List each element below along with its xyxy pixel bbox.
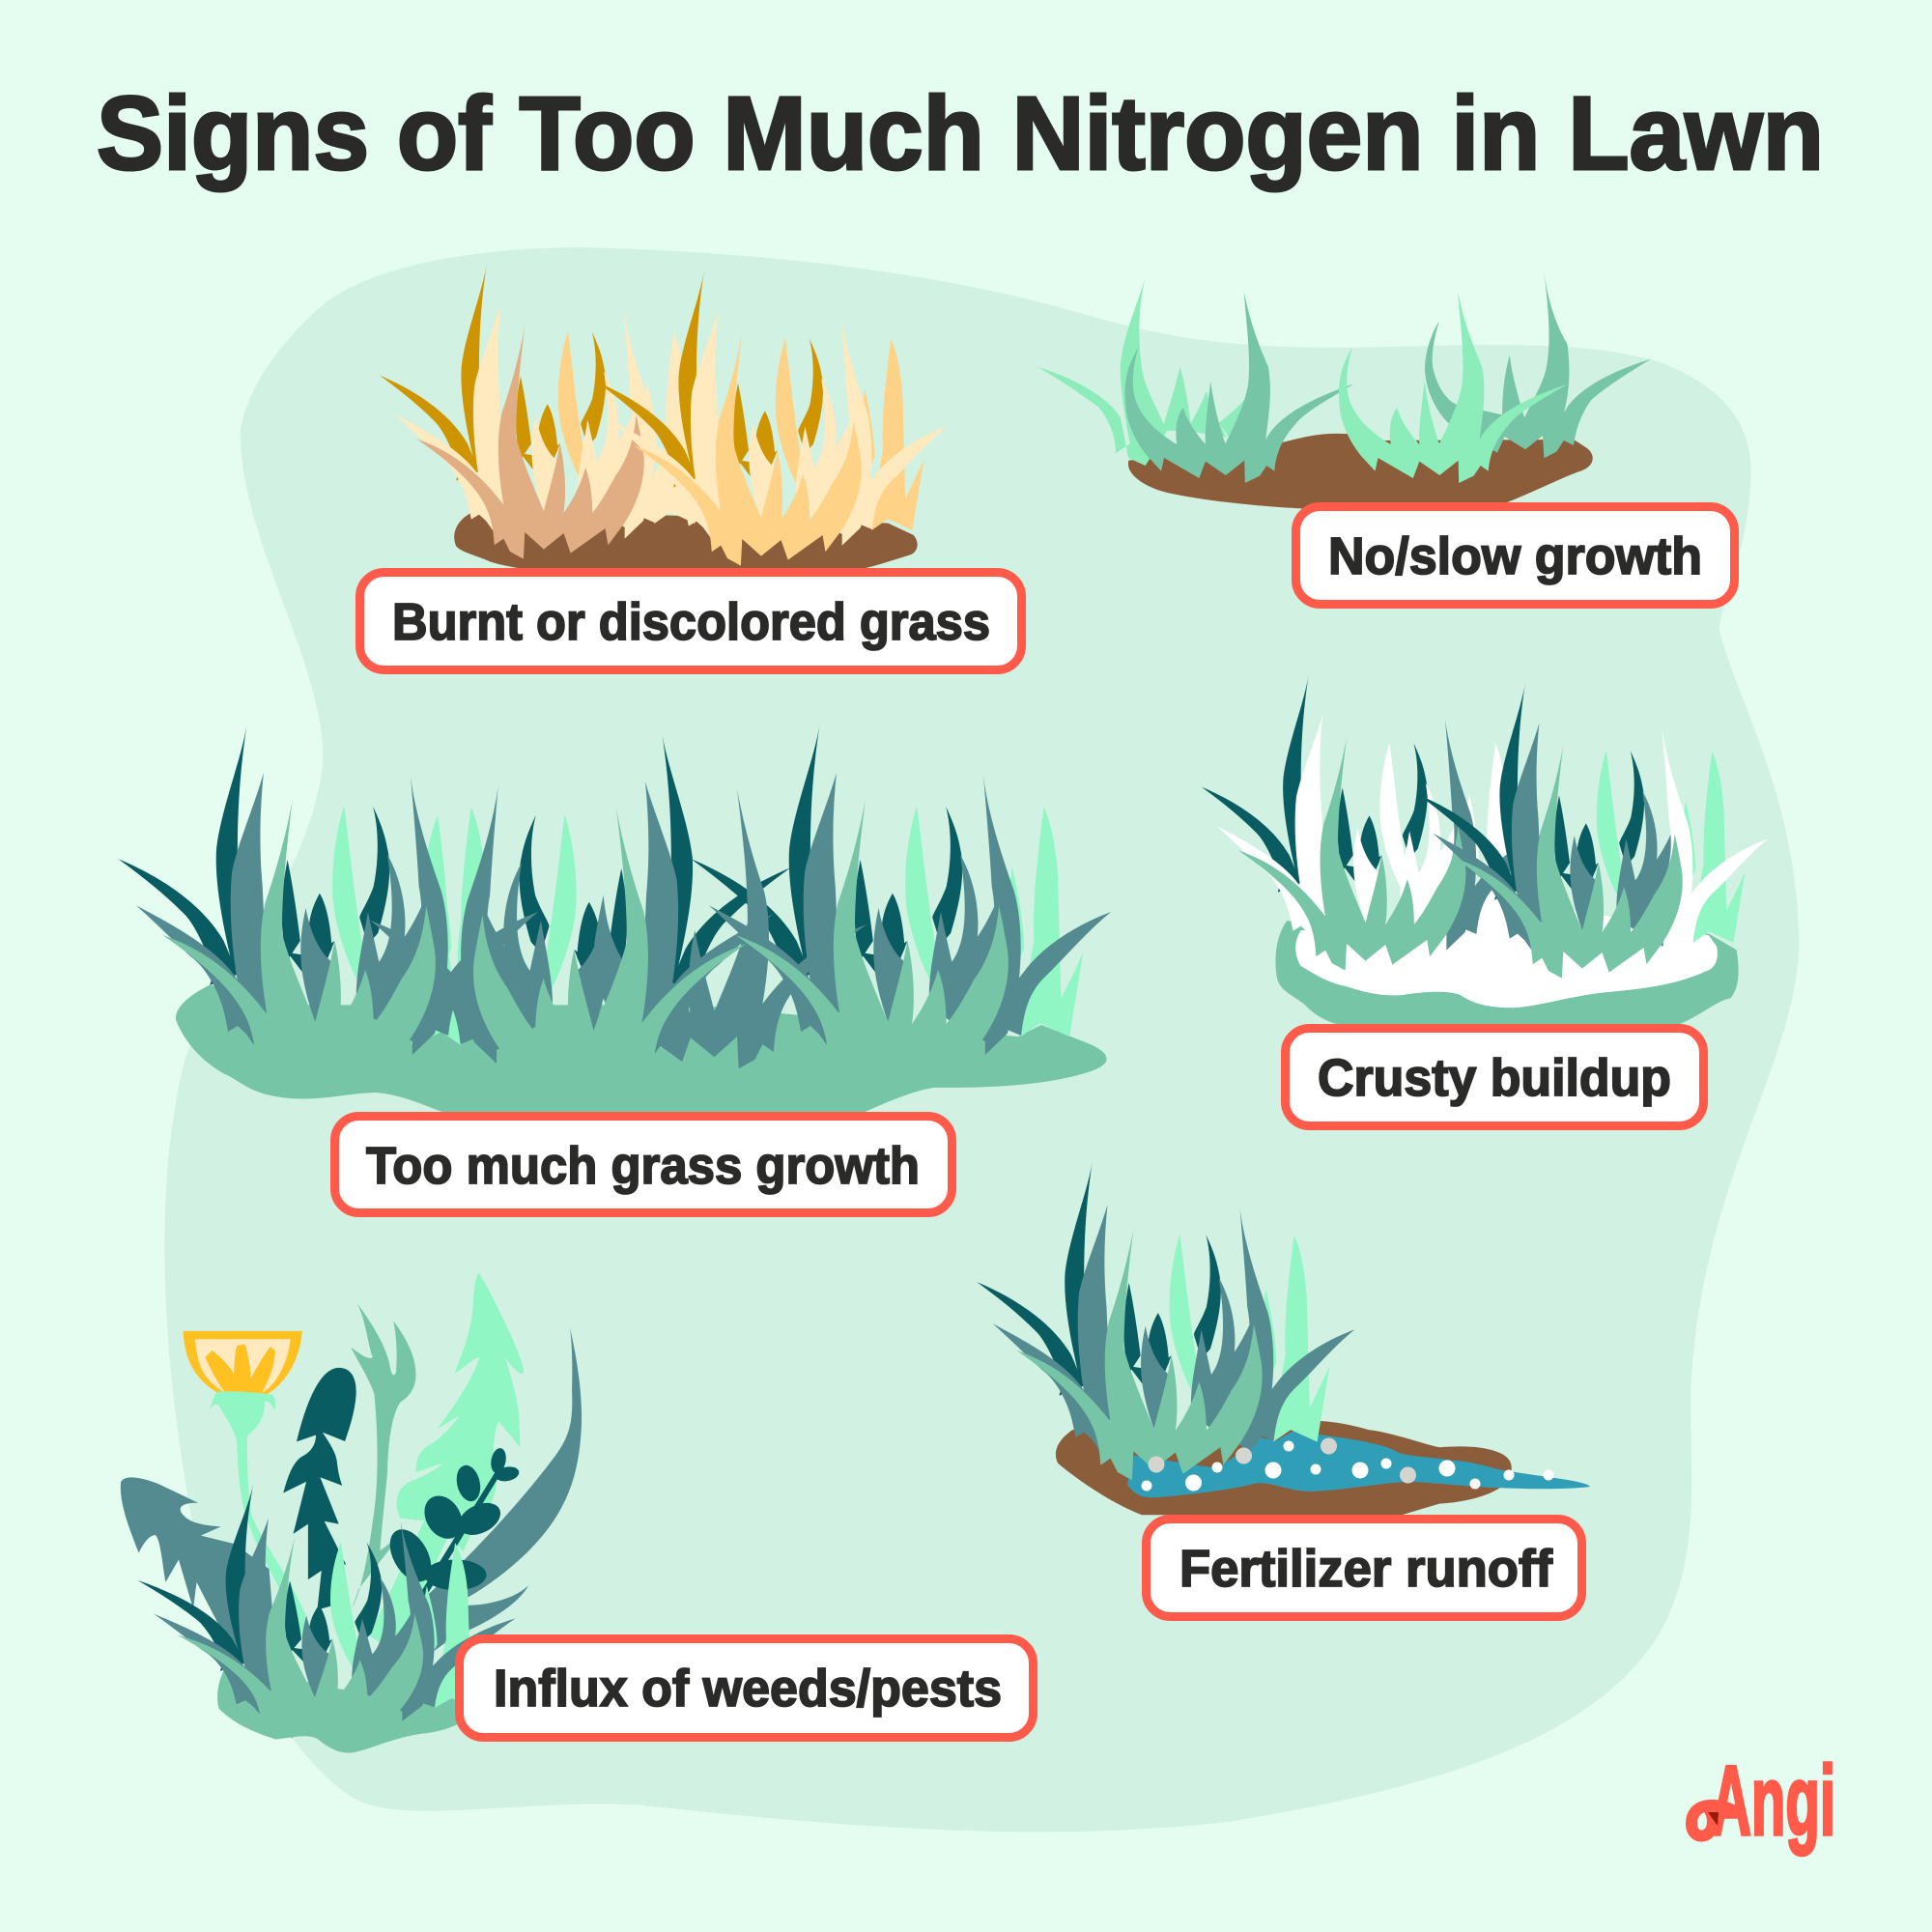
left burnt clump: [380, 263, 729, 559]
soil mound: [1056, 1421, 1512, 1515]
title: Signs of Too Much Nitrogen in Lawn: [97, 74, 1824, 191]
dark leafy sprig: [382, 1447, 521, 1603]
illustration: burnt or discolored grass: [380, 263, 947, 569]
label: burnt or discolored grass: Burnt or discolored grass: [392, 593, 990, 651]
label: crusty buildup: [1285, 1028, 1704, 1126]
right back blades: [1425, 265, 1651, 458]
back blades: [118, 724, 1083, 1045]
label: fertilizer runoff: Fertilizer runoff: [1179, 1540, 1553, 1598]
right front blades: [1339, 292, 1567, 483]
illustration: no/slow growth: [1037, 265, 1651, 509]
label: too much grass growth: Too much grass growth: [366, 1137, 920, 1195]
left jagged weed: [121, 1477, 276, 1656]
weeds: [121, 1273, 582, 1753]
illustration: fertilizer runoff: [977, 1160, 1590, 1515]
dark spear weed: [283, 1368, 356, 1608]
right burnt clump: [597, 270, 947, 566]
illustration: too much grass growth: [118, 724, 1111, 1113]
green mound: [217, 1663, 463, 1753]
big curved blade: [390, 1327, 582, 1711]
front blades: [162, 800, 1009, 1088]
label: no/slow growth: [1296, 506, 1735, 605]
logo: Angi: [1691, 1746, 1835, 1856]
soil mound: [1128, 434, 1593, 509]
label: crusty buildup: Crusty buildup: [1318, 1049, 1671, 1107]
illustration: crusty buildup: [1202, 674, 1768, 1026]
fertilizer pellets: [1142, 1437, 1553, 1492]
label: no/slow growth: No/slow growth: [1328, 527, 1702, 585]
soil mound: [454, 514, 918, 569]
label: influx of weeds/pests: [460, 1638, 1034, 1737]
left back blades: [1037, 273, 1246, 466]
bright tree weed: [369, 1273, 524, 1656]
middle blades: [136, 773, 1111, 1064]
logo: Angi: Angi: [1711, 1746, 1835, 1856]
green mound: [176, 985, 1107, 1113]
label: fertilizer runoff: [1146, 1519, 1582, 1617]
illustration: influx of weeds/pests: [121, 1273, 582, 1753]
background blob: [164, 247, 1799, 1832]
left clump: [1202, 674, 1551, 971]
label: burnt or discolored grass: [359, 572, 1022, 670]
grass clump: [138, 1483, 516, 1739]
dark front centre blades: [594, 789, 867, 1068]
green mound: [1275, 921, 1739, 1026]
dandelion flower: [184, 1331, 310, 1656]
runoff water: [1127, 1432, 1590, 1497]
label: influx of weeds/pests: Influx of weeds/pests: [494, 1660, 1002, 1718]
right clump: [1418, 682, 1768, 979]
forked weed: [351, 1303, 416, 1608]
grass clump: [977, 1160, 1354, 1480]
label: too much grass growth: [334, 1117, 952, 1213]
white crust: [1295, 892, 1718, 1008]
left front blades: [1125, 292, 1353, 483]
